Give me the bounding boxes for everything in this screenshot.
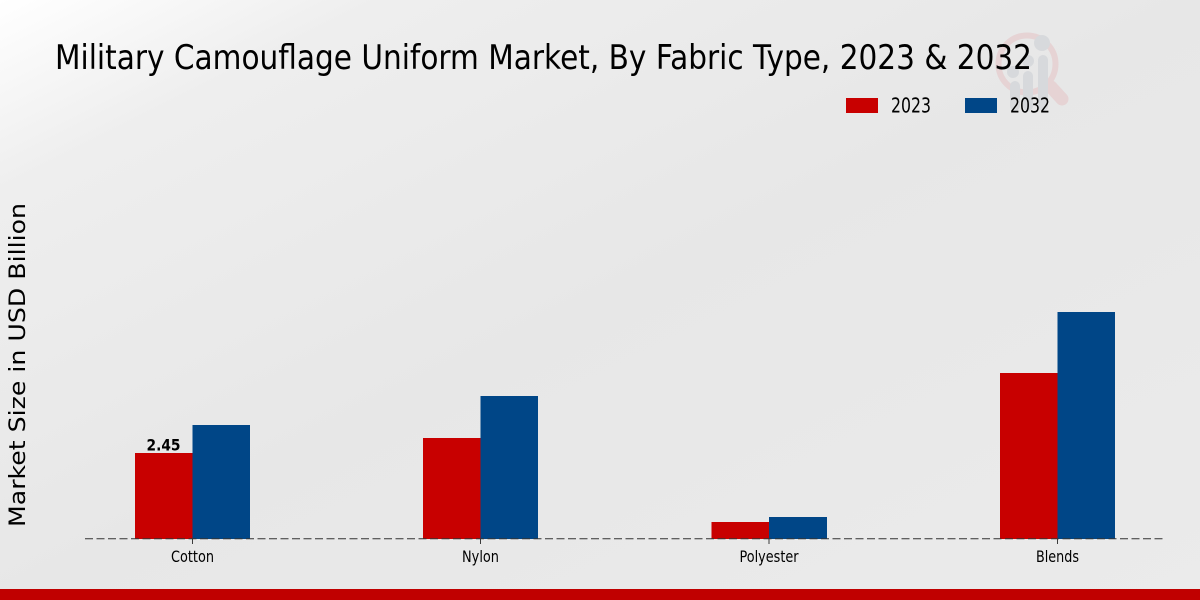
category labels: Cotton bbox=[171, 547, 214, 566]
legend: 2032: 2032 bbox=[1010, 94, 1050, 118]
bars: Nylon bbox=[423, 396, 538, 539]
legend: 2032 bbox=[965, 94, 1050, 118]
legend bbox=[846, 94, 1050, 118]
x axis baseline bbox=[85, 538, 1165, 540]
category labels: Blends bbox=[1036, 547, 1079, 566]
title: Military Camouflage Uniform Market, By Fabric Type, 2023 & 2032 bbox=[55, 38, 1032, 78]
y axis label: Market Size in USD Billion bbox=[6, 203, 31, 527]
bars: Polyester bbox=[712, 517, 827, 539]
watermark logo bbox=[998, 35, 1062, 111]
legend: 2023: 2023 bbox=[891, 94, 931, 118]
bars: Blends bbox=[1000, 312, 1115, 539]
legend: 2023 bbox=[846, 94, 931, 118]
footer bar bbox=[0, 589, 1200, 600]
category labels: Polyester bbox=[740, 547, 799, 566]
bar chart bbox=[85, 312, 1165, 566]
data label: 2.45 bbox=[146, 436, 180, 454]
bars: Cotton bbox=[135, 425, 250, 539]
category labels: Nylon bbox=[462, 547, 499, 566]
category labels bbox=[171, 547, 1079, 566]
